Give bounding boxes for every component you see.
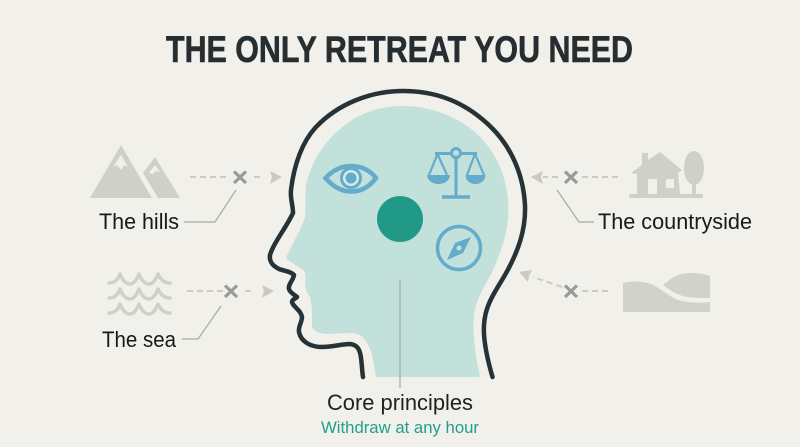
- title: THE ONLY RETREAT YOU NEED: [166, 29, 633, 70]
- label: the sea: The sea: [102, 327, 177, 352]
- icon: scales: [427, 148, 486, 197]
- head outline: [270, 91, 525, 377]
- icon: waves: [109, 274, 170, 314]
- label: the hills: [99, 190, 236, 234]
- arrow: land blocked: [519, 270, 608, 297]
- icon: eye: [326, 166, 376, 192]
- icon: compass: [438, 226, 480, 270]
- arrow: sea blocked: [187, 285, 274, 298]
- label: withdraw at any hour: Withdraw at any hour: [321, 419, 480, 437]
- icon: rolling land: [623, 273, 710, 312]
- leader line to core principles: [399, 280, 401, 388]
- label: the sea: [102, 306, 221, 352]
- icon: mountains: [90, 145, 180, 198]
- arrow: hills blocked: [190, 171, 282, 184]
- arrow: countryside blocked: [531, 171, 618, 184]
- core circle: [377, 196, 423, 242]
- label: the countryside: The countryside: [598, 209, 752, 234]
- label: the hills: The hills: [99, 209, 179, 234]
- head silhouette fill: [286, 106, 508, 377]
- label: the countryside: [557, 190, 752, 234]
- icon: house and tree: [629, 151, 704, 198]
- label: core principles: Core principles: [327, 390, 473, 415]
